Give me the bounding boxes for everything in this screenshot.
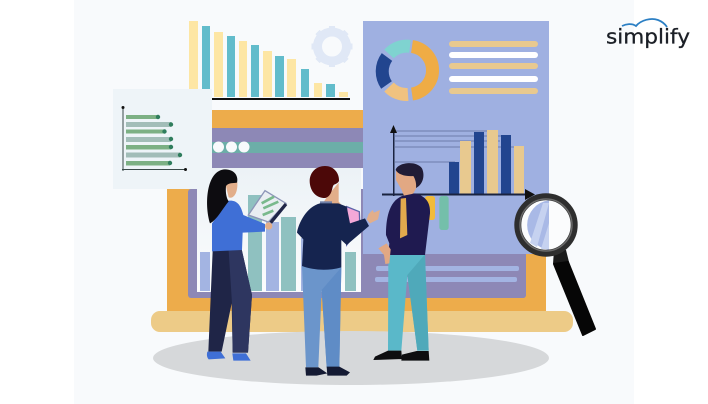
person: woman with clipboard	[207, 169, 286, 361]
panel: laptop body	[167, 168, 546, 311]
background panel	[74, 0, 634, 404]
column chart on report	[382, 125, 535, 200]
person: man in navy sweater	[297, 166, 380, 376]
panel: laptop lower text lines	[363, 254, 526, 298]
icon: magnifying glass	[518, 197, 595, 335]
top bar chart	[189, 21, 350, 100]
panel: window header	[212, 110, 363, 168]
bar chart on laptop screen	[200, 195, 356, 291]
icon: gear	[312, 26, 352, 67]
panel: floor shadow	[153, 331, 549, 385]
panel: laptop base	[151, 311, 573, 332]
panel: report sheet	[363, 21, 549, 254]
text lines on report	[449, 41, 538, 94]
donut chart	[382, 46, 433, 95]
person: man with tie	[373, 163, 449, 361]
logo: simplify: simplify	[606, 24, 690, 48]
panel: small horizontal bar chart	[113, 89, 212, 189]
